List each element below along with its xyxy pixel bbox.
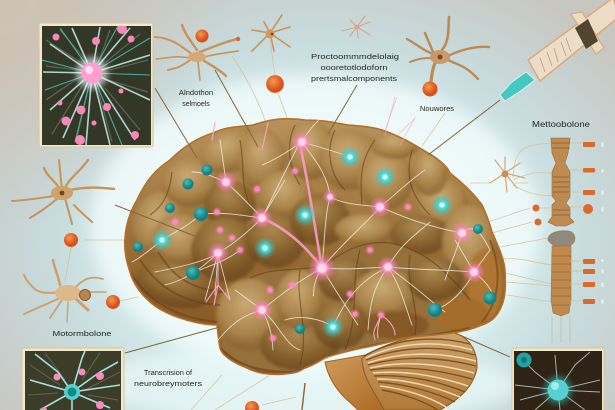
inset: neuron with pink synapses [39,23,153,147]
teal spheres [133,164,496,334]
brain: cerebrum [120,115,510,380]
neuron: top centre faint [342,16,370,38]
cerebellum [362,333,477,410]
column cap [548,231,575,248]
syringe barrel [528,0,615,81]
label: Mettoobolone: Mettoobolone [532,120,591,129]
glowing pink nodes [170,131,485,343]
label: Transcrision of neurobreymoters: Transcrision of [144,368,192,377]
thin connector lines [65,40,552,410]
syringe [500,0,615,101]
spine-like column chart [532,138,604,343]
neural network fibres [132,97,492,350]
label: Motormbolone: Motormbolone [52,329,112,338]
inset: bottom left neuron [22,348,124,410]
column body [551,246,571,316]
neuron: right faint [490,157,525,192]
sulci [150,125,470,365]
label: central components note line three: prertsmalcomponents [311,74,397,83]
signal spheres [64,30,438,410]
neuron: lower left [24,260,106,322]
neuron: left [12,160,114,224]
glowing cyan nodes [151,146,453,338]
brainstem [325,355,395,410]
lower rim shading [130,240,498,372]
gyri: upper lobes [121,118,503,321]
leader lines [115,70,510,410]
label: central components note: Proctoommmdelolaig [311,52,399,61]
label: central components note line two: oooretotlodoforn [320,65,388,72]
syringe flange and ring [571,12,604,54]
label: Transcrision of neurobreymoters: neurobreymoters [134,379,202,388]
label: Alndothon selmoels: selmoels [182,101,210,108]
neuron: top right [407,17,489,82]
label: Nouwores: Nouwores [420,104,454,113]
inset: bottom right neuron [512,348,604,410]
label: Alndothon selmoels: Alndothon [179,88,213,97]
gyri: temporal lobe [216,242,488,375]
neuron: top small [252,15,290,51]
neuron: top left [155,25,238,80]
syringe needle hub [500,72,535,101]
column tabs [532,142,595,304]
